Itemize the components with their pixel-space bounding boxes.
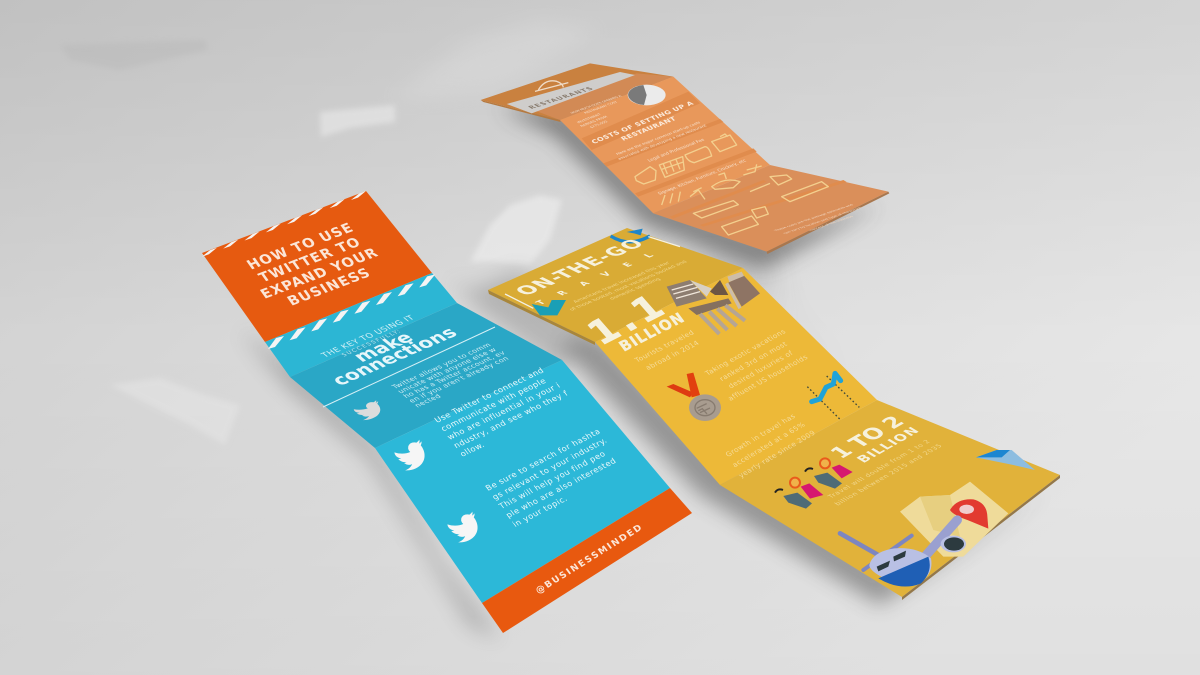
text: exotic vacations [703,328,810,403]
text: connect paragraph: Twitter allows you to comm [389,341,493,391]
icon: airplane [840,520,966,587]
text: connect paragraph [389,340,519,409]
heading: how to use twitter [239,218,391,316]
text: growth in travel [721,410,817,480]
icon: bird two [392,439,435,473]
text: exotic vacations: affluent US households [726,353,810,403]
subheading: successfully: SUCCESSFULLY: [341,329,404,358]
icon: people [775,458,853,509]
text: connect paragraph: nected [412,392,443,409]
text: travel intro: of those booked, most vacations booked and [568,260,690,312]
icon: blue arc and flag [611,229,650,242]
text: tourists traveled: Tourists traveled [632,329,696,364]
icon: bird three [445,511,488,545]
text: travel intro: Americans travel increased this year [572,261,673,304]
icons: cost categories [635,134,828,235]
icon: cloche [535,81,568,91]
grey header band [507,72,635,113]
top edge rules [505,237,680,308]
stat: 1 to 2 billion: BILLION [854,425,924,465]
panel: on-the-go travel brochure [488,228,1060,600]
heading: make connections: make [349,329,418,366]
text: influencers paragraph [433,364,576,459]
heading: on-the-go: ON-THE-GO [510,236,651,298]
heading: how to use twitter: EXPAND YOUR [258,245,382,302]
divider line [323,327,495,407]
text: exotic vacations: Taking exotic vacations [703,328,788,378]
text: exotic vacations: desired luxuries of [727,349,795,390]
icon: teal arrow [532,300,566,315]
cover panel [202,191,432,342]
heading: make connections: connections [328,324,462,389]
text: travel intro: domestic spending [609,277,663,301]
teal strip [265,273,457,377]
text: connect paragraph: ho has a Twitter account, ev [401,349,507,400]
heading: costs of setting up a restaurant: RESTAURANT [619,116,678,142]
chart: growth line [807,373,859,420]
icon: medal [667,373,721,421]
text: influencers paragraph: Use Twitter to connect and [433,366,546,425]
text: influencers paragraph: ollow. [458,440,487,459]
text: connect paragraph: unicate with anyone else w [395,346,498,395]
text: influencers paragraph: communicate with people [439,376,548,433]
text: connect paragraph: en if you aren't already con [407,355,511,404]
icon: monuments [667,272,760,334]
bottom stripes [268,274,435,349]
text: hashtags paragraph: in your topic. [511,494,569,529]
pie chart [628,85,666,105]
text: restaurant stat [575,112,613,131]
stat: 1.1 billion: 1.1 [580,286,677,352]
panel: restaurant brochure [481,63,889,254]
text: growth in travel: yearly rate since 2009 [737,429,817,480]
heading: how to use twitter: HOW TO USE [244,220,357,273]
text: costs intro: Here are the major common start-up costs [615,120,701,156]
text: growth in travel: accelerated at a 65% [731,421,807,469]
text: hashtags paragraph [483,427,629,529]
section bands [582,92,847,227]
text: restaurant footer: can vary by location and type of restaurant [781,206,864,234]
text: travel will double: billion between 2015 and 2035 [833,443,945,507]
footer band [482,488,692,633]
stat: 1 to 2 billion: 1 TO 2 [824,412,909,462]
text: tourists traveled [632,329,704,373]
text: restaurant footer [772,203,872,238]
main teal panel [375,360,670,603]
text: restaurant footer: concept of the business [807,215,854,231]
heading: restaurant band title: RESTAURANTS [526,86,596,110]
panel: twitter brochure [202,191,692,633]
icon: map and pin [900,482,1008,557]
text: restaurant stat: RANGES FROM [579,115,609,128]
text: restaurant intro: HOW MUCH DOES OPENING A [570,94,623,114]
label: signage, kitchen, furniture: Signage, Kitchen, Furniture, Crockery, etc [657,158,748,196]
heading: travel: TRAVEL [534,246,672,306]
text: influencers paragraph: ndustry, and see who they f [452,389,570,450]
text: hashtags paragraph: This will help you find peo [496,449,608,511]
text: hashtags paragraph: gs relevant to your industry. [491,436,609,502]
text: costs intro: associated with developing a new restaurant [617,123,708,161]
heading: how to use twitter: TWITTER TO [256,235,365,286]
label: legal and professional fee: Legal and Professional Fee [646,137,706,163]
text: restaurant stat: INVESTMENT [576,113,603,124]
text: travel will double: Travel will double from 1 to 2 [825,438,933,500]
heading: how to use twitter: BUSINESS [285,265,374,309]
icon: bird one [351,400,389,421]
text: hashtags paragraph: ple who are also interested [504,456,618,520]
text: growth in travel: Growth in travel has [724,412,797,459]
icon: paper plane [976,450,1035,470]
top stripes [202,191,366,257]
text: exotic vacations: ranked 3rd on most [718,340,789,383]
text: restaurant stat: $275,000 [589,120,609,129]
text: restaurant intro: RESTAURANT COST [583,100,620,114]
text: restaurant footer: These costs are the average estimates and [772,203,855,232]
text: tourists traveled: abroad in 2014 [644,339,701,372]
shaded fold panel [290,303,562,448]
shadows [240,108,1050,640]
footer handle: @BUSINESSMINDED [534,523,646,596]
heading: costs of setting up a restaurant: COSTS OF SETTING UP A [590,100,696,145]
subheading: the key to using it: THE KEY TO USING IT [318,313,417,359]
text: hashtags paragraph: Be sure to search for hashta [484,427,602,493]
text: influencers paragraph: who are influential in your i [446,381,562,442]
stat: 1.1 billion: BILLION [615,309,689,355]
